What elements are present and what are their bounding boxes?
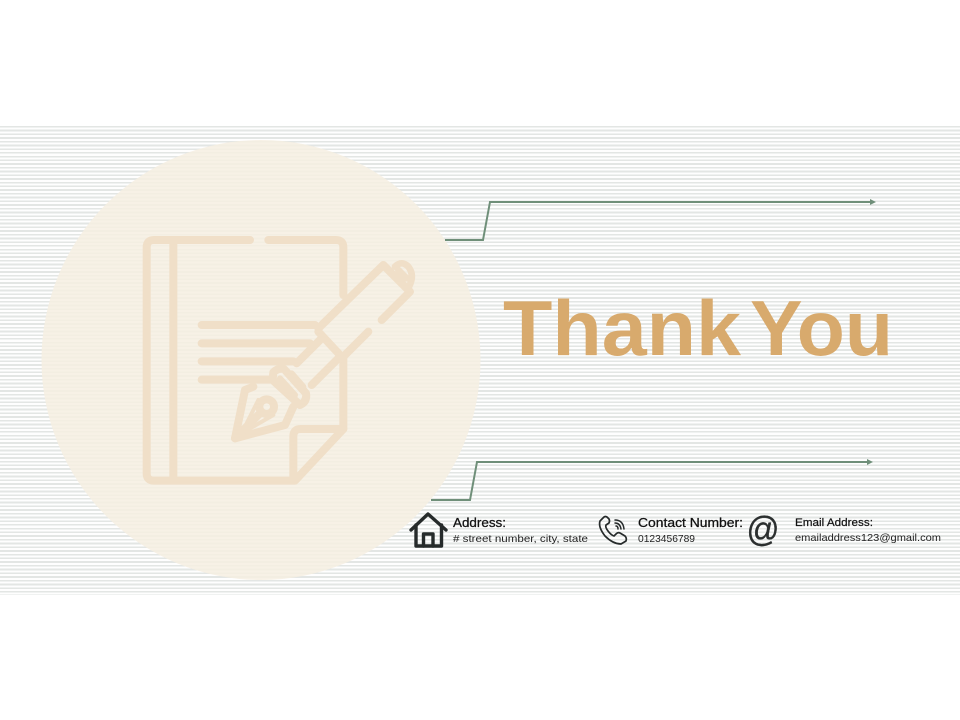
icon: phone bbox=[600, 516, 626, 544]
arrow: bottom green connector bbox=[431, 459, 873, 500]
icon: house bbox=[411, 514, 446, 546]
title: You bbox=[750, 284, 893, 372]
text block: email address bbox=[795, 517, 941, 544]
icon: at sign: @ bbox=[746, 510, 779, 549]
text block: email address: Email Address: bbox=[795, 517, 873, 529]
title: Thank bbox=[503, 284, 742, 372]
text block: address bbox=[453, 516, 588, 545]
text block: contact number: Contact Number: bbox=[638, 516, 743, 530]
striped background band bbox=[0, 126, 960, 595]
icon: notebook and fountain pen bbox=[147, 240, 412, 481]
text block: email address: emailaddress123@gmail.com bbox=[795, 532, 941, 544]
title bbox=[503, 284, 893, 372]
text block: address: Address: bbox=[453, 516, 506, 530]
text block: contact number bbox=[638, 516, 743, 545]
arrow: top green connector bbox=[445, 199, 876, 240]
panel: beige circle bbox=[42, 140, 480, 580]
text block: address: # street number, city, state bbox=[453, 533, 588, 545]
text block: contact number: 0123456789 bbox=[638, 533, 695, 545]
